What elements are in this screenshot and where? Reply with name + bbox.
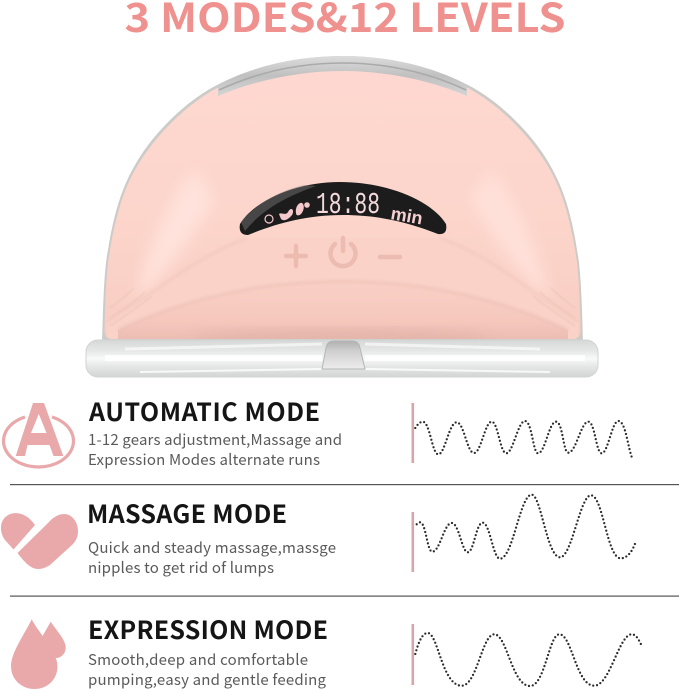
description <box>88 429 342 470</box>
display screen <box>240 182 446 235</box>
wave chart: automatic <box>412 403 633 463</box>
row: expression mode <box>11 611 641 690</box>
heading: AUTOMATIC MODE <box>88 393 320 429</box>
description: nipples to get rid of lumps <box>88 557 274 578</box>
plus button <box>286 246 306 266</box>
wave chart: massage <box>412 495 636 572</box>
description: Smooth,deep and comfortable <box>88 649 308 670</box>
icon: milk drops <box>11 619 66 689</box>
device shell <box>102 56 583 342</box>
base tray <box>86 340 598 377</box>
wave chart: expression <box>412 624 641 686</box>
icon: automatic A <box>3 403 74 467</box>
row: automatic mode <box>3 393 633 470</box>
description: Quick and steady massage,massge <box>88 537 336 558</box>
tray clasp <box>322 341 365 369</box>
description: Expression Modes alternate runs <box>88 449 320 470</box>
device pink body <box>104 71 580 339</box>
heading: MASSAGE MODE <box>87 495 287 531</box>
minus button <box>380 255 400 259</box>
product: breast pump <box>86 55 598 377</box>
description <box>88 649 327 690</box>
heading: EXPRESSION MODE <box>88 611 328 647</box>
divider <box>10 484 679 485</box>
power button <box>330 238 355 266</box>
row: massage mode <box>1 495 636 578</box>
display unit: min <box>389 203 424 228</box>
description: pumping,easy and gentle feeding <box>88 669 327 690</box>
description: 1-12 gears adjustment,Massage and <box>88 429 342 450</box>
icon: split heart <box>1 513 78 569</box>
top grey band <box>218 56 467 96</box>
display icons <box>265 202 310 223</box>
display digits: 18:88 <box>316 188 380 223</box>
description <box>88 537 336 578</box>
divider <box>10 596 679 597</box>
